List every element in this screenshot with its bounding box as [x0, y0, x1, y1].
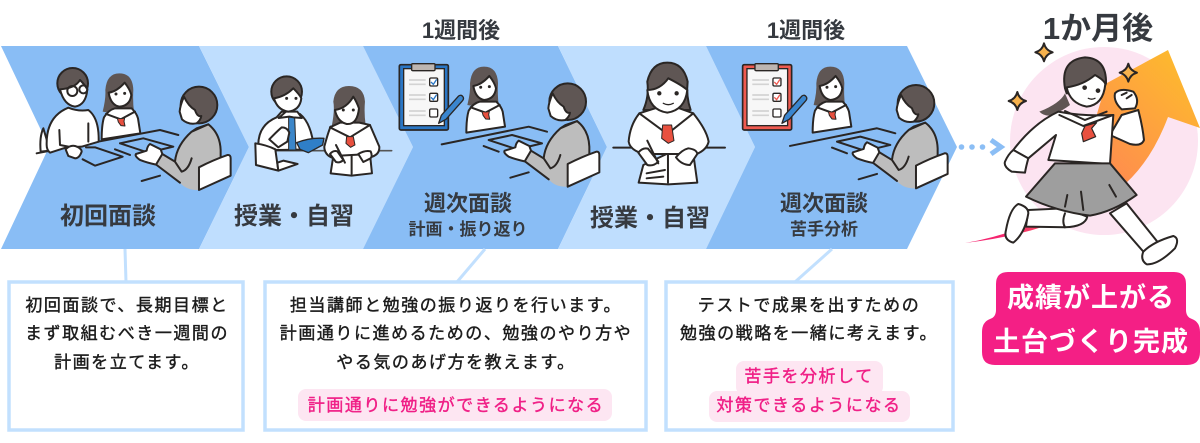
panel: weekly meeting description	[265, 282, 646, 430]
connector: box 3	[795, 249, 832, 282]
chevron: 初回面談	[1, 46, 249, 249]
panel: first meeting description: まず取組むべき一週間の	[25, 324, 229, 343]
heading: 週次面談 2: 週次面談	[780, 191, 868, 216]
panel: first meeting description	[9, 282, 243, 430]
chevron: 週次面談 計画・振り返り	[363, 46, 607, 249]
illustration: student studying alone	[613, 63, 725, 184]
panel: weekly meeting description: 計画通りに進めるための、勉強のやり方や	[280, 324, 632, 343]
chevron: 授業・自習 2	[558, 46, 755, 249]
icon: blue checklist clipboard	[399, 64, 463, 130]
panel: weekly meeting description: やる気のあげ方を教えます。	[336, 353, 576, 372]
badge: 成績が上がる 土台づくり完成	[982, 272, 1200, 365]
connector: box 1	[125, 249, 126, 282]
panel: weakness analysis description	[666, 282, 953, 430]
label: 1週間後: 1週間後	[422, 18, 500, 43]
label: 1か月後: 1か月後	[1043, 11, 1153, 46]
panel: weekly meeting description: 計画通りに勉強ができるようになる	[308, 396, 604, 415]
icon: red checklist clipboard	[743, 64, 807, 130]
illustration: parent, student and teacher meeting	[37, 68, 231, 190]
heading: 週次面談: 週次面談	[424, 191, 512, 216]
subheading: 苦手分析: 苦手分析	[790, 219, 858, 239]
panel: weakness analysis description: 対策できるようになる	[716, 396, 902, 415]
arrow: dotted to result	[959, 140, 1001, 154]
badge: 成績が上がる 土台づくり完成: 成績が上がる	[1007, 282, 1175, 313]
illustration: running student	[1005, 57, 1177, 264]
illustration: pink circle	[1010, 47, 1198, 235]
panel: weakness analysis description: テストで成果を出すための	[698, 296, 920, 315]
chevron: 授業・自習	[199, 46, 413, 249]
panel: weakness analysis description: 苦手を分析して	[744, 367, 874, 386]
panel: weakness analysis description: 勉強の戦略を一緒に考えます。	[680, 324, 938, 343]
icon: sparkles	[1009, 43, 1137, 110]
heading: 授業・自習 2: 授業・自習	[590, 205, 710, 232]
heading: 初回面談: 初回面談	[60, 203, 156, 230]
illustration: teacher and student studying together	[255, 76, 392, 176]
badge: 成績が上がる 土台づくり完成: 土台づくり完成	[993, 327, 1189, 357]
label: 1週間後 2: 1週間後	[767, 18, 845, 43]
panel: first meeting description: 計画を立てます。	[54, 353, 200, 372]
chevron: 週次面談 苦手分析	[706, 46, 957, 249]
connector: box 2	[457, 249, 485, 282]
illustration: weakness analysis meeting	[790, 67, 948, 188]
illustration: rising arrow	[965, 50, 1200, 243]
illustration: weekly meeting with teacher	[442, 67, 599, 187]
heading: 授業・自習: 授業・自習	[234, 203, 354, 230]
subheading: 計画・振り返り: 計画・振り返り	[408, 220, 528, 239]
panel: weekly meeting description: 担当講師と勉強の振り返りを行います。	[290, 296, 622, 315]
panel: first meeting description: 初回面談で、長期目標と	[25, 296, 229, 315]
